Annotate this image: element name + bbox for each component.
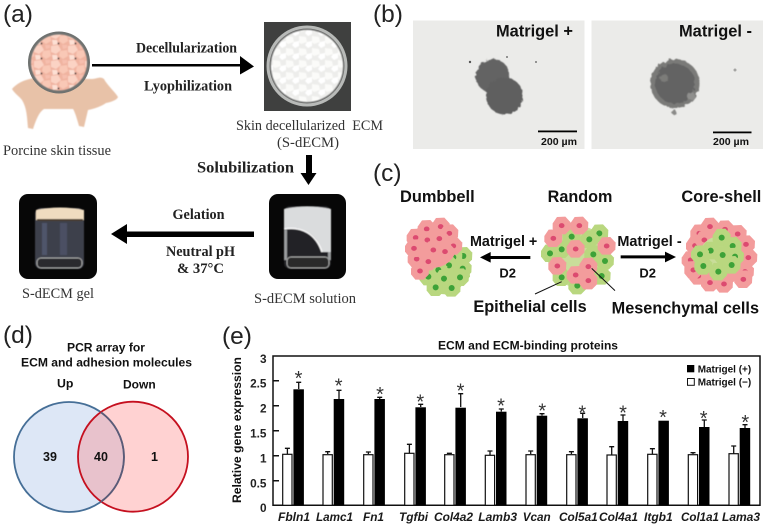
significance asterisks: *	[741, 412, 749, 434]
caption: skin decellularized ECM: Skin decellularized ECM	[236, 118, 383, 134]
y axis labels: 0	[260, 501, 267, 515]
gene labels: Col1a1	[681, 510, 719, 524]
bars: Matrigel plus	[293, 389, 750, 505]
significance asterisks: *	[457, 380, 465, 402]
label: Gelation: Gelation	[172, 207, 225, 223]
label: D2: D2	[639, 265, 656, 280]
scale bar	[538, 130, 577, 132]
label: Matrigel minus: Matrigel -	[617, 234, 682, 250]
diagram: random spheroid	[541, 217, 616, 294]
gene labels: Col4a2	[434, 510, 473, 524]
y axis labels: 2.5	[250, 376, 267, 390]
panel label (e): (e)	[222, 323, 252, 350]
label: Solubilization: Solubilization	[197, 160, 294, 176]
significance asterisks	[295, 368, 749, 434]
arrow: random to core-shell	[621, 252, 676, 262]
scale bar label: 200 µm	[541, 137, 577, 148]
legend: Matrigel (−)	[698, 377, 751, 388]
heading: Dumbbell: Dumbbell	[400, 188, 475, 206]
heading: Random: Random	[548, 188, 612, 206]
micrograph: Matrigel minus core-shell spheroid	[592, 20, 763, 149]
label: Neutral pH: Neutral pH	[166, 244, 235, 260]
label: Matrigel plus: Matrigel +	[496, 22, 573, 40]
gene labels: Itgb1	[644, 510, 673, 524]
arrow: gelation	[111, 224, 254, 244]
gene labels: Fbln1	[278, 510, 310, 524]
y axis labels: 1.5	[250, 426, 267, 440]
photo: S-dECM solution vial	[269, 194, 346, 279]
label: D2: D2	[499, 265, 516, 280]
heading: ECM and adhesion molecules: ECM and adhesion molecules	[21, 356, 192, 370]
heading: Core-shell: Core-shell	[681, 188, 761, 206]
significance asterisks: *	[619, 402, 627, 424]
panel label (a): (a)	[3, 1, 33, 28]
y axis labels: 1	[260, 451, 267, 465]
panel label (d): (d)	[3, 322, 33, 349]
y axis title: Relative gene expression	[230, 357, 244, 503]
caption: S-dECM solution: S-dECM solution	[254, 291, 356, 307]
micrograph: Matrigel plus dumbbell spheroid	[413, 20, 584, 149]
gene labels: Lamb3	[478, 510, 517, 524]
significance asterisks: *	[538, 400, 546, 422]
label: epithelial cells: Epithelial cells	[473, 298, 587, 316]
gene labels	[278, 510, 760, 524]
error bars	[285, 382, 748, 455]
chart frame and ticks	[273, 356, 760, 505]
significance asterisks: *	[659, 407, 667, 429]
panel: (b) brightfield micrographs	[373, 1, 763, 149]
pointer lines to cell types	[535, 268, 615, 294]
chart title: ECM and ECM-binding proteins	[438, 340, 618, 353]
arrow: random to dumbbell	[480, 252, 530, 263]
scale bar	[713, 132, 752, 133]
significance asterisks: *	[376, 384, 384, 406]
scale bar label: 200 µm	[713, 137, 749, 148]
venn: down set	[78, 402, 188, 512]
gene labels: Col5a1	[559, 510, 598, 524]
panel label (b): (b)	[373, 1, 403, 28]
count: 1: 1	[151, 450, 158, 464]
gene labels: Lamc1	[316, 510, 353, 524]
diagram: dumbbell spheroid	[405, 218, 472, 297]
gene labels: Fn1	[363, 510, 384, 524]
significance asterisks: *	[578, 402, 586, 424]
panel: (e) gene expression bar chart	[222, 323, 760, 524]
panel label (c): (c)	[373, 160, 402, 187]
gene labels: Lama3	[722, 510, 760, 524]
y axis labels	[250, 352, 267, 515]
y axis labels: 2	[260, 402, 267, 416]
label: and 37 degrees C: & 37°C	[177, 261, 224, 277]
photo: lyophilized S-dECM in dish	[264, 22, 351, 111]
gene labels: Tgfbi	[399, 510, 429, 524]
gene labels: Col4a1	[599, 510, 638, 524]
significance asterisks: *	[497, 396, 505, 418]
heading: PCR array for: PCR array for	[67, 340, 145, 354]
panel: (c) spheroid morphology schematic	[373, 160, 761, 317]
caption: porcine skin tissue: Porcine skin tissue	[3, 143, 111, 159]
significance asterisks: *	[700, 408, 708, 430]
venn: up set outline over overlap	[101, 412, 124, 502]
icon: pig with dish of skin tissue	[12, 32, 118, 129]
label: Matrigel plus: Matrigel +	[470, 234, 537, 250]
label: Matrigel minus: Matrigel -	[679, 22, 752, 40]
label: Lyophilization: Lyophilization	[144, 78, 232, 94]
label: Decellularization: Decellularization	[136, 40, 237, 56]
panel: (a) S-dECM preparation workflow	[3, 1, 383, 307]
count: 40: 40	[94, 450, 108, 464]
y axis labels: 0.5	[250, 476, 267, 490]
bars: Matrigel minus	[283, 453, 738, 505]
legend	[687, 365, 751, 388]
panel: (d) Venn diagram	[3, 322, 192, 512]
venn: up set	[14, 402, 124, 512]
gene labels: Vcan	[523, 510, 551, 524]
y axis labels: 3	[260, 352, 267, 366]
label: Down: Down	[123, 378, 156, 392]
legend: Matrigel (+)	[698, 365, 751, 376]
label: Up: Up	[57, 376, 73, 390]
label: mesenchymal cells: Mesenchymal cells	[612, 299, 759, 317]
arrow: decellularization	[92, 56, 254, 74]
diagram: core-shell spheroid	[682, 218, 757, 293]
significance asterisks: *	[295, 368, 303, 390]
significance asterisks: *	[335, 376, 343, 398]
significance asterisks: *	[416, 391, 424, 413]
count: 39: 39	[43, 450, 57, 464]
caption: S-dECM gel: S-dECM gel	[22, 286, 94, 302]
caption: S-dECM abbreviation: (S-dECM)	[277, 135, 339, 151]
arrow: solubilization down	[300, 155, 316, 185]
photo: S-dECM gel vial	[19, 194, 97, 279]
